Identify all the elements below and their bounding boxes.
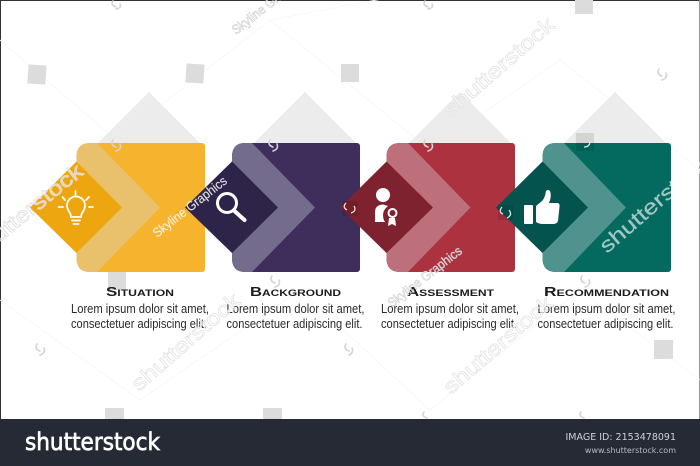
watermarks: Skyline Graphics [150, 173, 230, 240]
watermarks: Skyline Graphics [385, 243, 465, 310]
panel body [386, 143, 515, 272]
icon: thumbs up [524, 190, 560, 224]
chevron band [542, 143, 626, 272]
backing triangle [98, 92, 200, 143]
text: situation description: consectetuer adipiscing elit. [71, 317, 207, 331]
heading: situation: Situation [106, 285, 174, 299]
chevron band [76, 143, 160, 272]
watermarks: shutterstock [595, 149, 700, 258]
panel body [542, 143, 671, 272]
chevron band [386, 143, 470, 272]
footer logo: shutterstock [25, 428, 160, 456]
text: assessment description: Lorem ipsum dolor sit amet, [381, 302, 519, 316]
panel: recommendation [496, 92, 671, 272]
watermarks: shutterstock [439, 13, 560, 122]
watermarks: shutterstock [439, 291, 558, 399]
diamond [340, 162, 433, 253]
panel: assessment [340, 92, 515, 272]
backing triangle [409, 92, 511, 143]
watermark marks on panels [342, 133, 594, 220]
icon: magnifying glass [218, 194, 244, 220]
text: situation description: Lorem ipsum dolor sit amet, [71, 302, 209, 316]
panel: background [185, 92, 360, 272]
heading: assessment: Assessment [407, 285, 495, 299]
diamond [496, 162, 588, 253]
panel body [232, 143, 360, 272]
heading: background: Background [250, 285, 342, 299]
icon: person with award ribbon [375, 188, 396, 226]
heading: recommendation: Recommendation [544, 285, 669, 299]
panel body [76, 143, 205, 272]
text: background description: Lorem ipsum dolor sit amet, [226, 302, 364, 316]
text: recommendation description: consectetuer adipiscing elit. [538, 317, 674, 331]
backing triangle [254, 92, 356, 143]
text: recommendation description: Lorem ipsum dolor sit amet, [538, 302, 676, 316]
footer url: www.shutterstock.com [585, 446, 676, 455]
text: background description: consectetuer adipiscing elit. [226, 317, 362, 331]
footer image id: IMAGE ID: 2153478091 [566, 432, 676, 443]
watermarks: shutterstock [127, 289, 245, 396]
panel: situation [30, 92, 205, 272]
text: assessment description: consectetuer adipiscing elit. [381, 317, 517, 331]
diamond [30, 162, 122, 253]
footer bar [0, 419, 700, 466]
icon: light bulb [58, 191, 93, 224]
backing triangle [564, 92, 666, 143]
chevron band [232, 143, 315, 272]
diamond [185, 162, 278, 253]
